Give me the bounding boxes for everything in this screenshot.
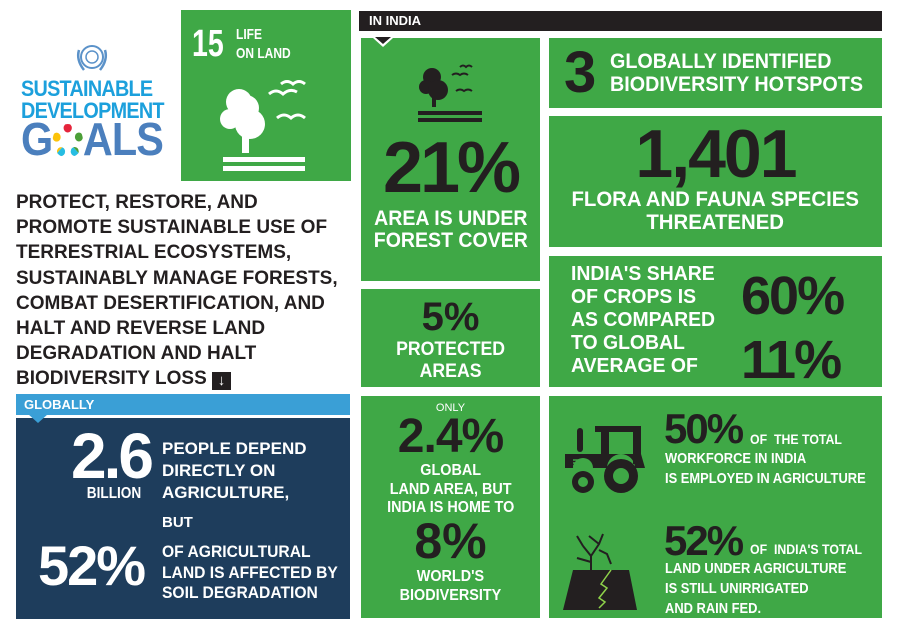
text: people depend: PEOPLE DEPEND [162,439,307,458]
panel: goal 15 tile [181,10,351,181]
goal name: ON LAND [236,45,291,62]
label: GLOBALLY IDENTIFIED [610,50,832,73]
text: soil degradation: OF AGRICULTURAL [162,542,311,561]
text: people depend: AGRICULTURE, [162,483,289,502]
panel: agriculture: LAND UNDER AGRICULTURE [665,560,846,577]
label [571,263,715,377]
label: BIODIVERSITY [400,587,501,604]
stat: 52%: 52% [38,534,144,597]
text block: goal statement: ↓ [218,372,225,389]
label [387,462,514,516]
stat: 21%: 21% [383,128,518,208]
text block: goal statement: COMBAT DESERTIFICATION, AND [16,293,325,314]
stat: 1,401: 1,401 [635,116,796,192]
pointer [28,414,48,423]
label [373,207,528,252]
text block: goal statement: PROTECT, RESTORE, AND [16,192,258,213]
text: unirrigated: OF INDIA'S TOTAL [750,541,862,557]
text: people depend: DIRECTLY ON [162,461,275,480]
stat: 50%: 50% [664,405,742,452]
heading: globally: GLOBALLY [24,397,94,412]
panel: hotspots [549,38,882,108]
label: OF CROPS IS [571,286,696,308]
label: AS COMPARED [571,309,715,331]
stat: 52%: 52% [664,517,742,564]
stat: 3: 3 [564,40,596,105]
label: FLORA AND FAUNA SPECIES [572,188,859,211]
logo: SDG [21,45,164,165]
stat: 2.6 billion: 2.6 [71,420,151,492]
icon: dry land [563,534,637,610]
panel: agriculture [549,396,882,618]
panel: threatened species [549,116,882,247]
stat: 11%: 11% [741,330,840,390]
label: AREAS [420,361,481,382]
panel: crops share [549,256,882,387]
heading: globally [16,394,350,415]
text: people depend [162,439,307,502]
logo text: SUSTAINABLE [21,76,152,101]
panel: biodiversity share [361,396,540,618]
label: THREATENED [647,210,784,234]
icon: tree and birds [220,80,306,171]
label: AVERAGE OF [571,355,698,377]
label: AREA IS UNDER [374,207,527,230]
text block: goal statement: PROMOTE SUSTAINABLE USE OF [16,217,327,238]
heading: in india: IN INDIA [369,13,421,28]
panel: forest cover [361,38,540,281]
text: but: BUT [162,514,193,531]
label [572,188,859,234]
stat: 5%: 5% [422,295,479,339]
icon: tree [418,64,482,122]
text: soil degradation: LAND IS AFFECTED BY [162,562,338,582]
logo text: DEVELOPMENT [21,98,164,123]
label: TO GLOBAL [571,332,685,354]
text: only: ONLY [436,402,465,414]
label: PROTECTED [396,339,505,360]
text block: goal statement [16,192,338,390]
panel: agriculture: IS EMPLOYED IN AGRICULTURE [665,470,866,487]
label: INDIA IS HOME TO [387,499,514,516]
heading: in india [359,11,882,31]
logo: SDG: G ALS [21,113,163,165]
panel: protected areas [361,289,540,387]
text: workforce: OF THE TOTAL [750,431,842,447]
stat: 8%: 8% [414,513,487,569]
label: LAND AREA, BUT [390,480,511,498]
stat: 60%: 60% [741,266,843,326]
label: GLOBAL [420,462,481,479]
label [610,50,863,96]
panel: agriculture: AND RAIN FED. [665,600,761,617]
goal name: LIFE [236,26,262,43]
text: soil degradation [162,542,338,602]
label [396,339,505,382]
text block: goal statement: TERRESTRIAL ECOSYSTEMS, [16,242,291,263]
label: BIODIVERSITY HOTSPOTS [610,72,863,96]
label: FOREST COVER [373,229,528,252]
label: INDIA'S SHARE [571,263,715,285]
panel: agriculture: WORKFORCE IN INDIA [665,450,806,467]
panel: agriculture: IS STILL UNIRRIGATED [665,580,809,597]
text block: goal statement: SUSTAINABLY MANAGE FORESTS, [16,268,338,289]
logo text [21,76,164,123]
icon: tractor [565,426,645,493]
panel: globally stats [16,418,350,619]
stat: 2.4%: 2.4% [398,410,503,463]
text block: goal statement: BIODIVERSITY LOSS [16,368,207,389]
label: WORLD'S [417,568,484,585]
goal number: 15 [192,23,224,65]
text block: goal statement: HALT AND REVERSE LAND [16,318,265,339]
text: soil degradation: SOIL DEGRADATION [162,583,318,602]
icon: UN emblem [76,45,108,71]
label [400,568,501,604]
text block: goal statement: DEGRADATION AND HALT [16,343,256,364]
goal name [236,26,291,62]
panel: globally stats: BILLION [87,485,141,502]
pointer [373,38,393,47]
